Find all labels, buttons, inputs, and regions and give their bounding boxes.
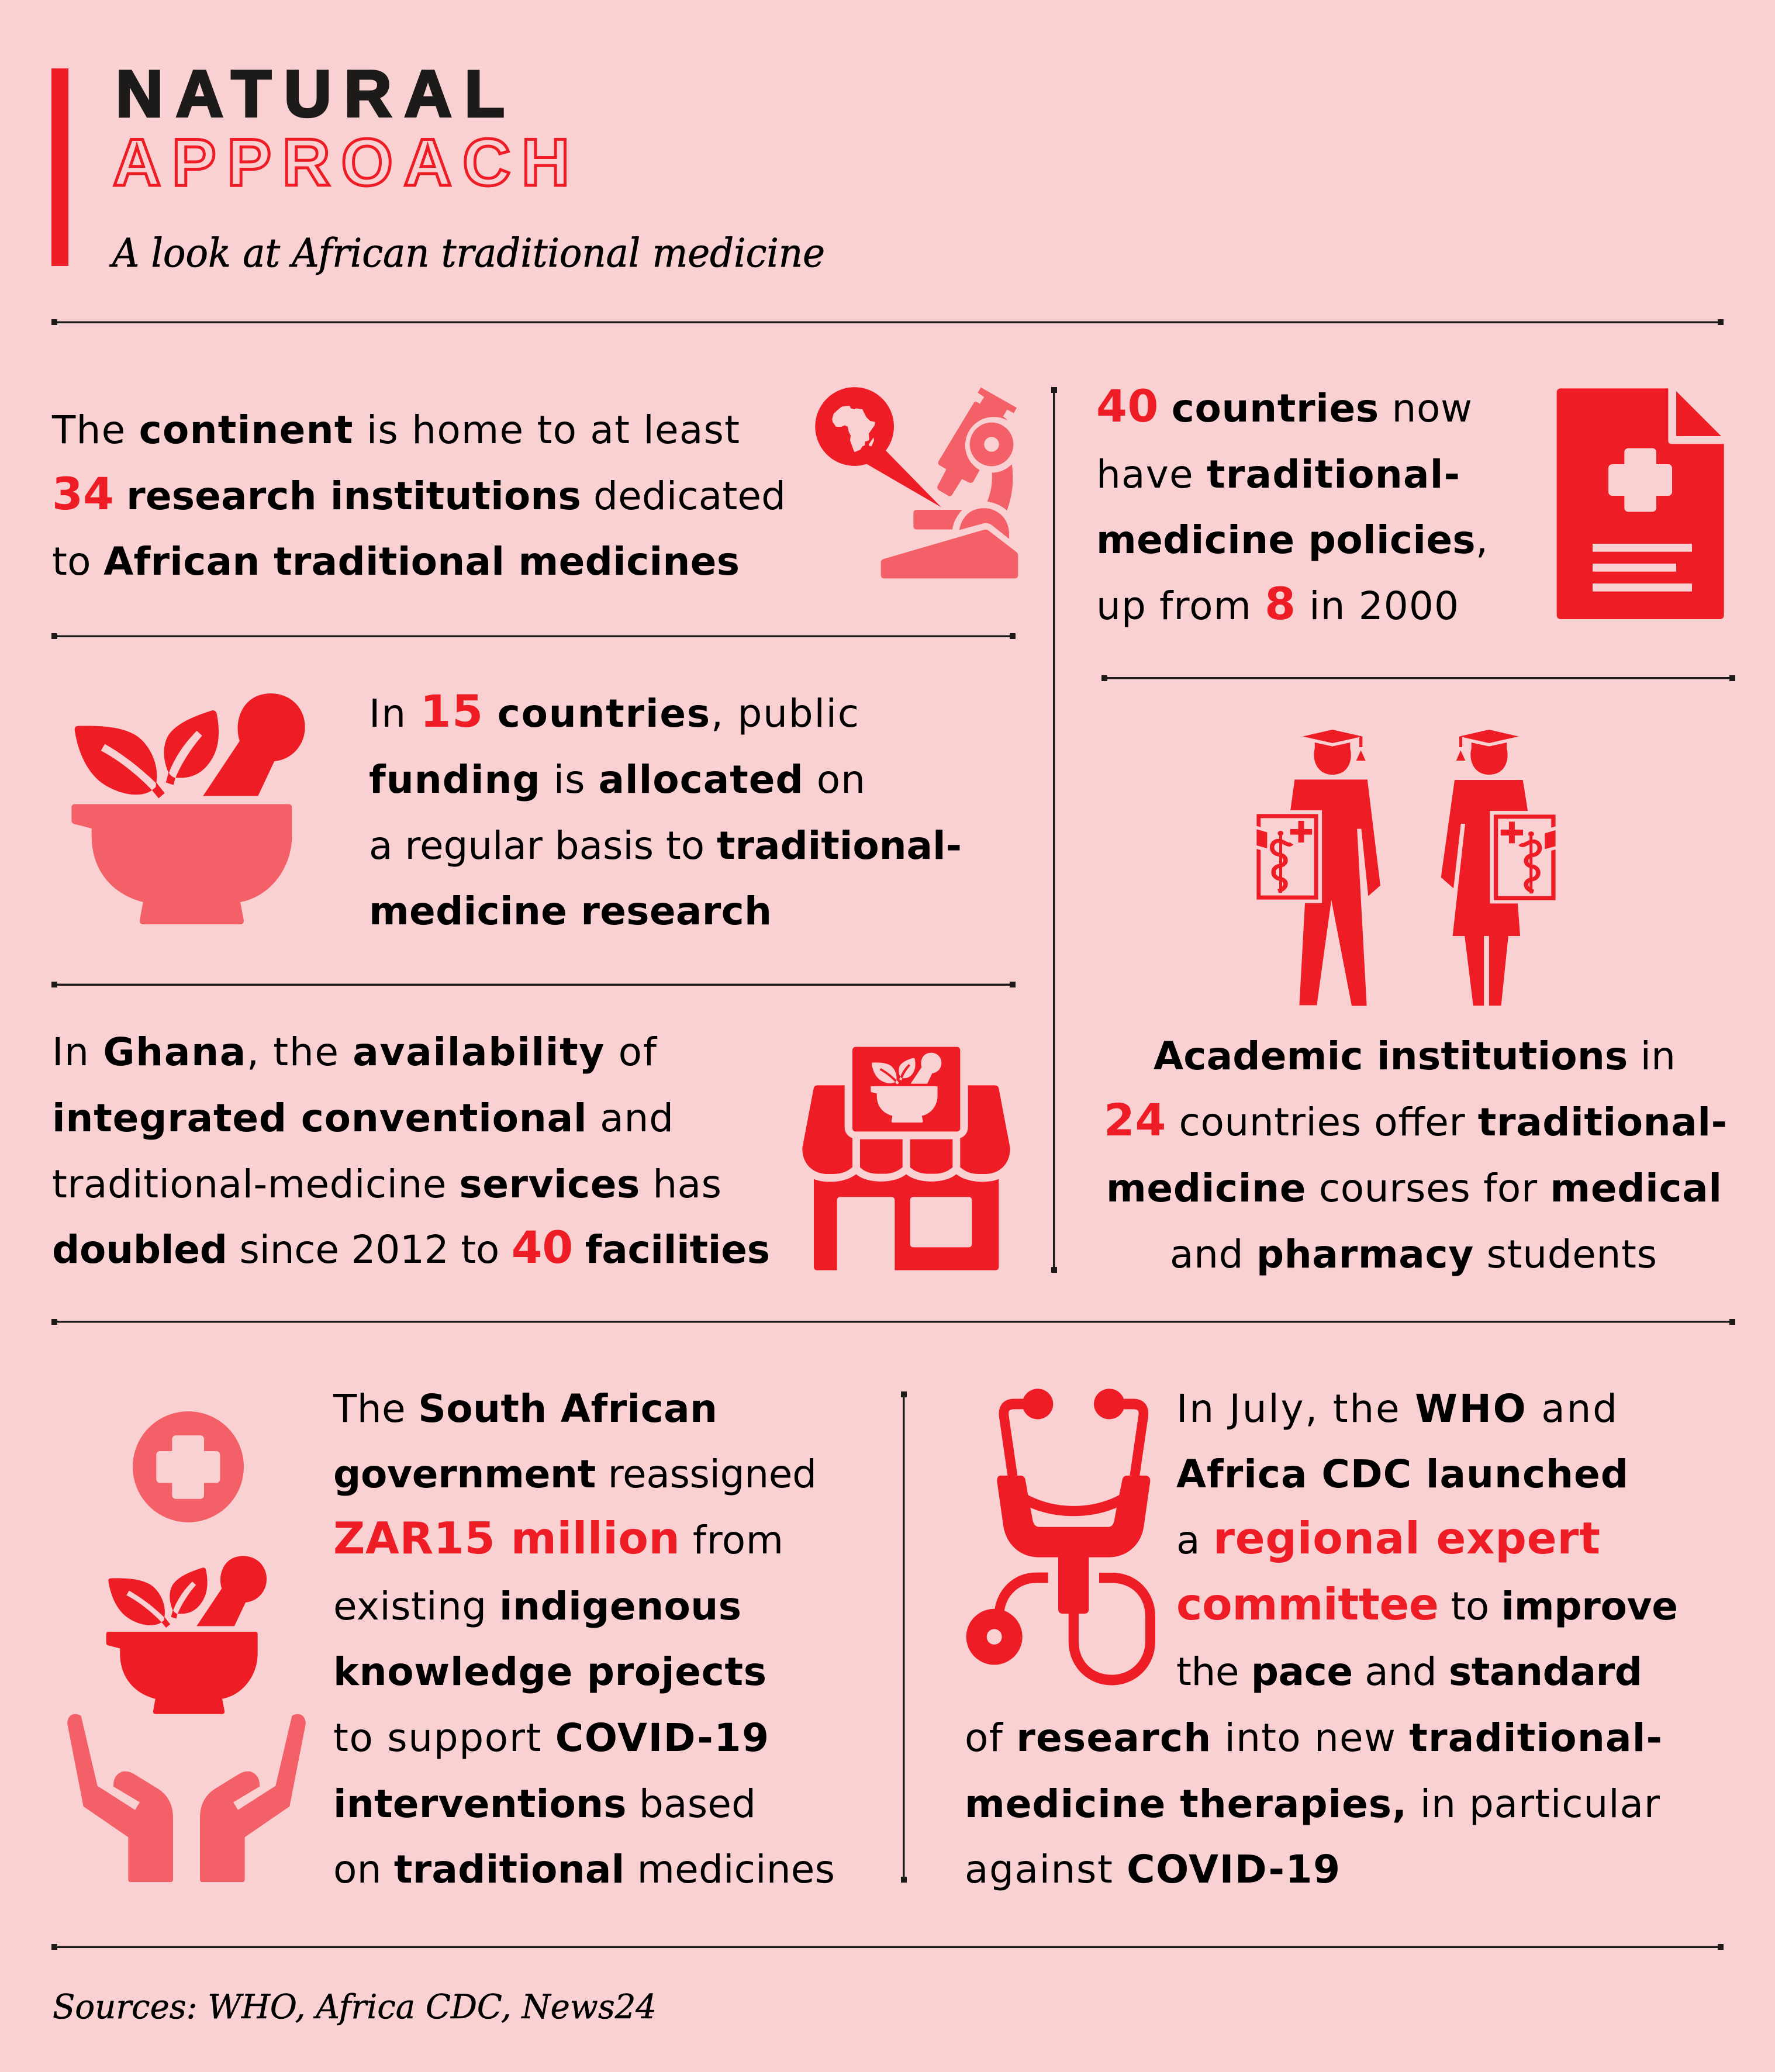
text: public funding: funding is allocated on	[369, 757, 865, 802]
text: policies: have traditional-	[1096, 452, 1460, 497]
text: South African funding: on traditional medicines	[333, 1847, 835, 1892]
heading: natural: NATURAL	[116, 57, 517, 130]
text: academic institutions: and pharmacy students	[1170, 1232, 1657, 1277]
text: Ghana services	[52, 1030, 770, 1273]
accent bar	[51, 68, 68, 266]
text: academic institutions: Academic institutions in	[1154, 1034, 1676, 1079]
female graduate	[1441, 730, 1556, 1006]
icon: mortar and pestle with leaves	[71, 693, 305, 924]
text: WHO and Africa CDC committee: medicine therapies, in particular	[965, 1781, 1660, 1826]
icon: stethoscope	[966, 1389, 1155, 1685]
text: public funding: a regular basis to traditional-	[369, 823, 962, 868]
icon: cross, mortar and open hands	[67, 1411, 306, 1882]
text: policies: medicine policies,	[1096, 517, 1488, 562]
male graduate	[1256, 730, 1380, 1006]
subtitle: A look at African traditional medicine	[109, 230, 825, 276]
text: South African funding: interventions based	[333, 1781, 756, 1826]
icon: two graduates holding medical certificates	[1256, 730, 1556, 1006]
text: WHO and Africa CDC committee: of research into new traditional-	[965, 1715, 1662, 1760]
dividers	[51, 319, 1735, 1950]
text: South African funding: ZAR15 million from	[333, 1512, 783, 1564]
text: research institutions: to African traditional medicines	[52, 539, 740, 584]
text: WHO and Africa CDC committee: a regional expert	[1176, 1512, 1600, 1564]
text: research institutions: 34 research institutions dedicated	[52, 468, 786, 520]
icon: pharmacy shop	[802, 1047, 1010, 1270]
text: WHO and Africa CDC committee: the pace and standard	[1176, 1649, 1642, 1694]
text: policies: up from 8 in 2000	[1096, 578, 1459, 630]
text: research institutions: The continent is home to at least	[51, 408, 740, 453]
text: Ghana services: doubled since 2012 to 40 facilities	[52, 1221, 770, 1273]
text: public funding: medicine research	[369, 889, 772, 934]
text: public funding: In 15 countries, public	[369, 685, 859, 737]
text: Ghana services: integrated conventional and	[52, 1096, 674, 1141]
text: WHO and Africa CDC committee: In July, the WHO and	[1176, 1386, 1617, 1431]
title block	[51, 57, 825, 276]
text: South African funding: government reassigned	[333, 1452, 817, 1497]
text: public funding	[369, 685, 962, 934]
text: academic institutions: medicine courses for medical	[1106, 1166, 1722, 1211]
icon: medical document	[1557, 388, 1724, 619]
text: academic institutions: 24 countries offer traditional-	[1104, 1094, 1727, 1146]
text: South African funding: The South African	[333, 1386, 717, 1431]
text: WHO and Africa CDC committee	[965, 1386, 1678, 1892]
text: Ghana services: traditional-medicine services has	[52, 1162, 721, 1207]
sources: Sources: WHO, Africa CDC, News24	[53, 1988, 657, 2026]
text: policies	[1096, 380, 1488, 630]
text: South African funding	[333, 1386, 835, 1892]
text: WHO and Africa CDC committee: Africa CDC launched	[1176, 1452, 1628, 1497]
text: academic institutions	[1104, 1034, 1727, 1277]
heading: approach: APPROACH	[113, 126, 581, 200]
text: WHO and Africa CDC committee: committee to improve	[1176, 1579, 1678, 1630]
text: research institutions	[51, 408, 786, 584]
text: South African funding: to support COVID-19	[333, 1715, 769, 1760]
icon: microscope with Africa callout	[815, 387, 1018, 578]
text: WHO and Africa CDC committee: against COVID-19	[965, 1847, 1340, 1892]
text: Ghana services: In Ghana, the availability of	[52, 1030, 658, 1075]
text: policies: 40 countries now	[1096, 380, 1472, 432]
text: South African funding: knowledge projects	[333, 1649, 766, 1694]
text: South African funding: existing indigenous	[333, 1584, 741, 1629]
